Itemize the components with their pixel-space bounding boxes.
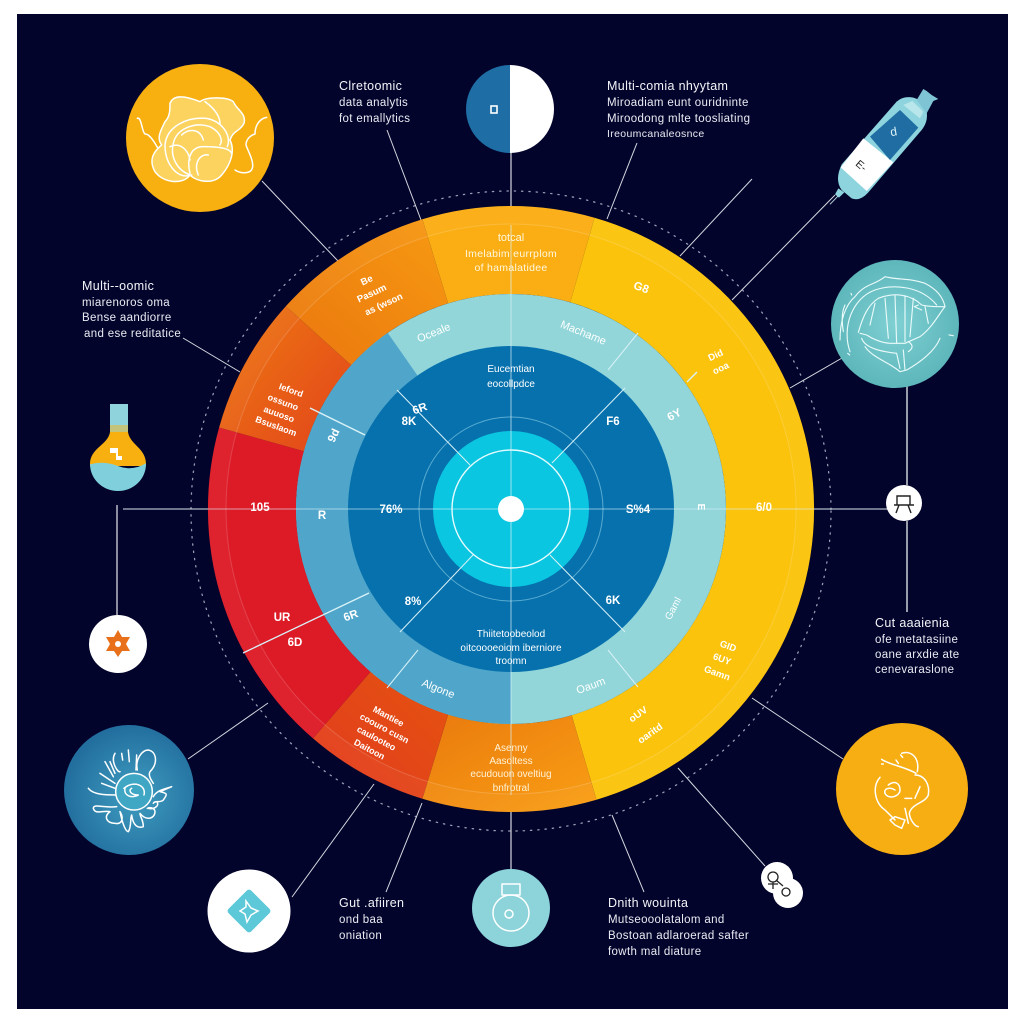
rotated ring names: Machame	[558, 319, 608, 348]
icon: amber brain/organ circle	[126, 64, 274, 212]
rotated ring names: Gaml	[663, 596, 684, 622]
label: deep orange bottom segment: Mantiee	[371, 704, 406, 729]
label: inner bottom	[460, 629, 562, 667]
caption: top left: Clretoomic	[339, 79, 402, 93]
segment: orange top	[286, 219, 448, 365]
caption: left: Bense aandiorre	[82, 312, 172, 324]
caption: left: Multi--oomic	[82, 279, 154, 293]
caption: top right: Ireoumcanaleosnce	[607, 128, 705, 140]
caption: right	[875, 616, 960, 676]
segment: light teal	[296, 294, 726, 724]
numbers: 6Y	[666, 407, 684, 424]
caption: bottom right: fowth mal diature	[608, 946, 702, 958]
icon: syringe tube: E-	[853, 158, 869, 174]
segment: red	[208, 428, 370, 738]
rotated ring names: Oaum	[575, 675, 607, 697]
label: orange top segment: as (wson	[363, 291, 405, 318]
caption: bottom right: Dnith wouinta	[608, 896, 688, 910]
numbers: 6R	[411, 401, 430, 417]
caption: bottom left: ond baa	[339, 914, 383, 926]
label: bottom orange: Aasoltess	[489, 756, 533, 767]
label: yellow lower: oUV	[627, 705, 650, 725]
segment: yellow right	[570, 218, 814, 800]
icon: white circle with teal diamond	[208, 870, 290, 952]
center dot	[498, 496, 524, 522]
segment: deep orange bottom	[313, 672, 448, 799]
numbers: 6/0	[756, 502, 772, 514]
label: top amber	[465, 232, 557, 274]
caption: left: miarenoros oma	[82, 297, 170, 309]
numbers: E	[695, 504, 706, 511]
dotted outer ring	[191, 191, 831, 831]
numbers: 8K	[402, 416, 417, 428]
caption: top right: Miroadiam eunt ouridninte	[607, 97, 749, 109]
segment: orange bottom	[422, 715, 596, 812]
label: inner top: eocollpdce	[487, 379, 535, 390]
caption: bottom left	[339, 896, 404, 942]
icon: white double blob	[761, 862, 803, 908]
label: bottom orange: Asenny	[494, 743, 528, 754]
segment: amber top	[422, 206, 594, 303]
label: deep orange top segment: Bsuslaom	[254, 414, 298, 438]
label: deep orange top segment: Ieford	[278, 381, 304, 399]
label: orange top segment: Pasum	[356, 282, 388, 305]
numbers: 6K	[606, 595, 621, 607]
panel: inner dark disc	[348, 346, 674, 672]
numbers: 6D	[288, 637, 302, 649]
caption: bottom left: oniation	[339, 930, 382, 942]
label: deep orange top segment: auuoso	[262, 404, 296, 425]
icon: teal bottle circle	[472, 869, 550, 947]
icon: syringe tube: d	[889, 124, 898, 139]
label: yellow lower: oaritd	[636, 721, 665, 746]
caption: top right: Multi-comia nhyytam	[607, 79, 728, 93]
rotated ring names: Oceale	[415, 321, 452, 345]
label: top amber: of hamalatidee	[474, 262, 548, 274]
rotated ring names: Algone	[420, 677, 456, 701]
caption: top right: Miroodong mlte toosliating	[607, 113, 750, 125]
caption: right: ofe metatasiine	[875, 634, 958, 646]
icon: blue microbe circle	[64, 725, 194, 855]
panel: outer ring segments	[208, 206, 814, 812]
inner cyan disc	[433, 431, 589, 587]
label: deep orange top segment	[254, 381, 304, 438]
numbers: UR	[274, 612, 291, 624]
numbers: F6	[606, 416, 620, 428]
label: inner bottom: troomn	[495, 656, 527, 667]
label: deep orange bottom segment: coouro cusn	[358, 711, 411, 745]
caption: bottom right	[608, 896, 749, 958]
outer band highlight	[217, 215, 805, 803]
numbers: 9d	[326, 427, 343, 444]
caption: right: Cut aaaienia	[875, 616, 949, 630]
label: orange top segment	[356, 273, 405, 318]
icon: flask	[90, 404, 146, 491]
panel: middle ring	[296, 294, 726, 724]
label: inner bottom: Thiitetoobeolod	[477, 629, 545, 640]
caption: top right	[607, 79, 750, 140]
label: top amber: Imelabim eurrplom	[465, 248, 557, 260]
label: yellow lower right: Gamn	[702, 664, 732, 683]
numbers	[250, 280, 772, 649]
caption: top left	[339, 79, 410, 125]
caption: right: cenevaraslone	[875, 664, 954, 676]
label: deep orange bottom segment: caulooteo	[355, 724, 398, 753]
radial crosshair lines	[123, 225, 888, 795]
caption: left	[82, 279, 181, 340]
icon: small white circle right	[886, 485, 922, 521]
caption: right: oane arxdie ate	[875, 649, 960, 661]
label: orange top segment: Be	[359, 273, 375, 288]
icon: teal striped organ circle	[831, 260, 959, 388]
icon: small white circle with orange star	[89, 615, 147, 673]
numbers: 6R	[342, 608, 361, 624]
numbers: 105	[250, 502, 270, 514]
label: inner top	[487, 364, 535, 390]
label: bottom orange: bnfrotral	[493, 783, 529, 794]
label: yellow lower right: GID	[718, 639, 738, 655]
caption: bottom right: Bostoan adlaroerad safter	[608, 930, 749, 942]
segment: deep orange top	[219, 306, 351, 451]
numbers: 8%	[405, 596, 421, 608]
connector lines	[117, 130, 907, 897]
caption: top left: data analytis	[339, 97, 408, 109]
label: inner top: Eucemtian	[487, 364, 535, 375]
label: bottom orange: ecudouon oveltiug	[470, 769, 552, 780]
label: yellow upper	[707, 347, 732, 377]
numbers: R	[318, 510, 327, 522]
rotated ring names	[415, 319, 684, 701]
icon: syringe tube	[830, 89, 938, 204]
label: deep orange top segment: ossuno	[266, 392, 300, 413]
caption: top left: fot emallytics	[339, 113, 410, 125]
label: yellow lower	[627, 705, 665, 746]
numbers: 76%	[379, 504, 403, 516]
label: yellow upper: ooa	[711, 360, 732, 377]
label: yellow lower right	[702, 639, 738, 683]
label: bottom orange	[470, 743, 552, 794]
numbers: S%4	[626, 504, 651, 516]
numbers: G8	[632, 280, 651, 297]
label: deep orange bottom segment: Daitoon	[352, 737, 387, 762]
caption: left: and ese reditatice	[84, 328, 181, 340]
label: yellow upper: Did	[707, 347, 725, 364]
label: deep orange bottom segment	[352, 704, 411, 762]
caption: bottom left: Gut .afiiren	[339, 896, 404, 910]
label: top amber: totcal	[498, 232, 524, 244]
segment: mid blue	[296, 333, 511, 724]
label: yellow lower right: 6UY	[711, 651, 733, 668]
icon: amber gut circle	[836, 723, 968, 855]
caption: bottom right: Mutseooolatalom and	[608, 914, 725, 926]
label: inner bottom: oitcoooeoiom iberniore	[460, 643, 562, 654]
icon: half circle top	[466, 65, 554, 153]
ring labels	[250, 232, 772, 794]
